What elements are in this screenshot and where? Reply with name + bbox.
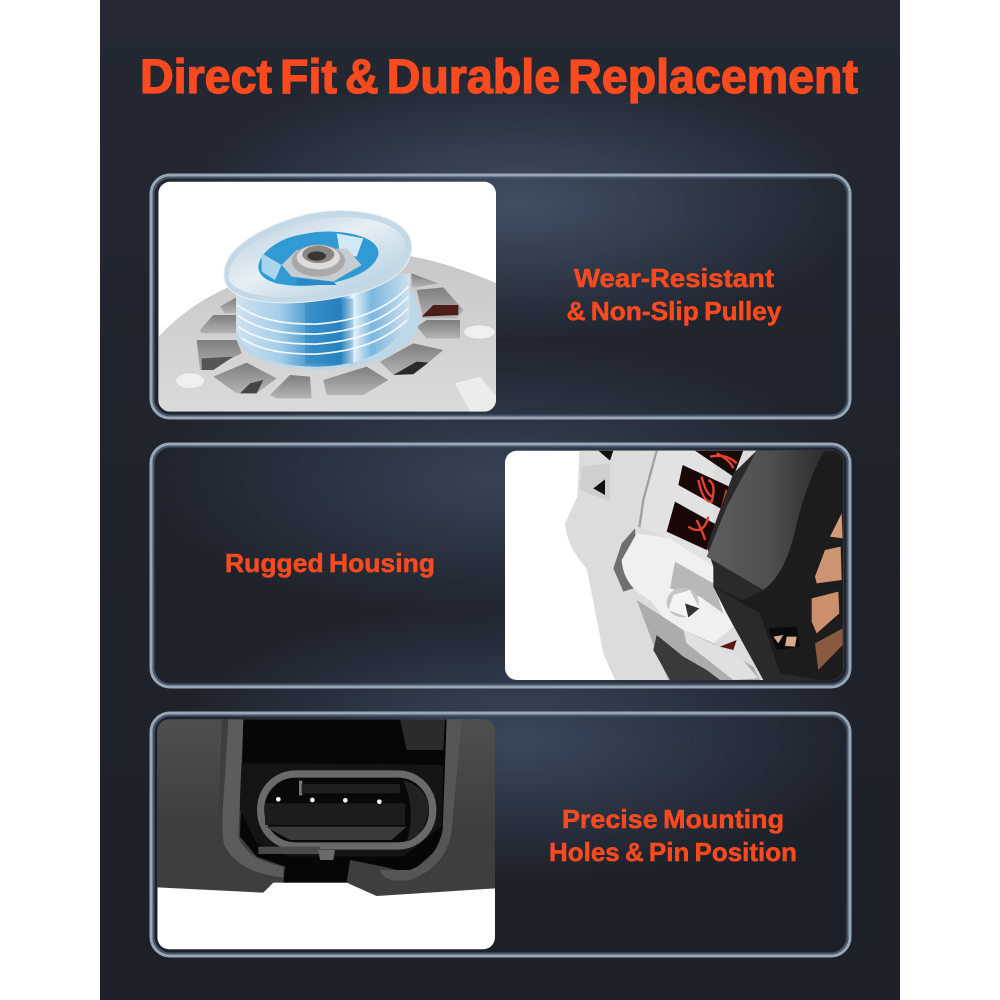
title: Direct Fit & Durable Replacement bbox=[140, 51, 858, 104]
panel frame: pulley bbox=[151, 175, 850, 418]
photo: pulley bbox=[158, 182, 497, 412]
label: connector bbox=[549, 804, 797, 867]
label: connector: Precise Mounting bbox=[562, 804, 784, 834]
panel frame: housing bbox=[151, 444, 850, 687]
panel: housing bbox=[151, 444, 850, 687]
label: pulley bbox=[566, 263, 782, 326]
label: housing: Rugged Housing bbox=[225, 548, 435, 578]
label: pulley: & Non-Slip Pulley bbox=[566, 296, 782, 326]
photo: connector bbox=[157, 719, 495, 949]
photo: housing bbox=[505, 451, 843, 680]
dark background panel bbox=[100, 0, 900, 1000]
panel: connector bbox=[151, 713, 850, 956]
label: connector: Holes & Pin Position bbox=[549, 837, 797, 867]
panel frame: connector bbox=[151, 713, 850, 956]
panel: pulley bbox=[151, 175, 850, 418]
label: pulley: Wear-Resistant bbox=[574, 263, 774, 293]
